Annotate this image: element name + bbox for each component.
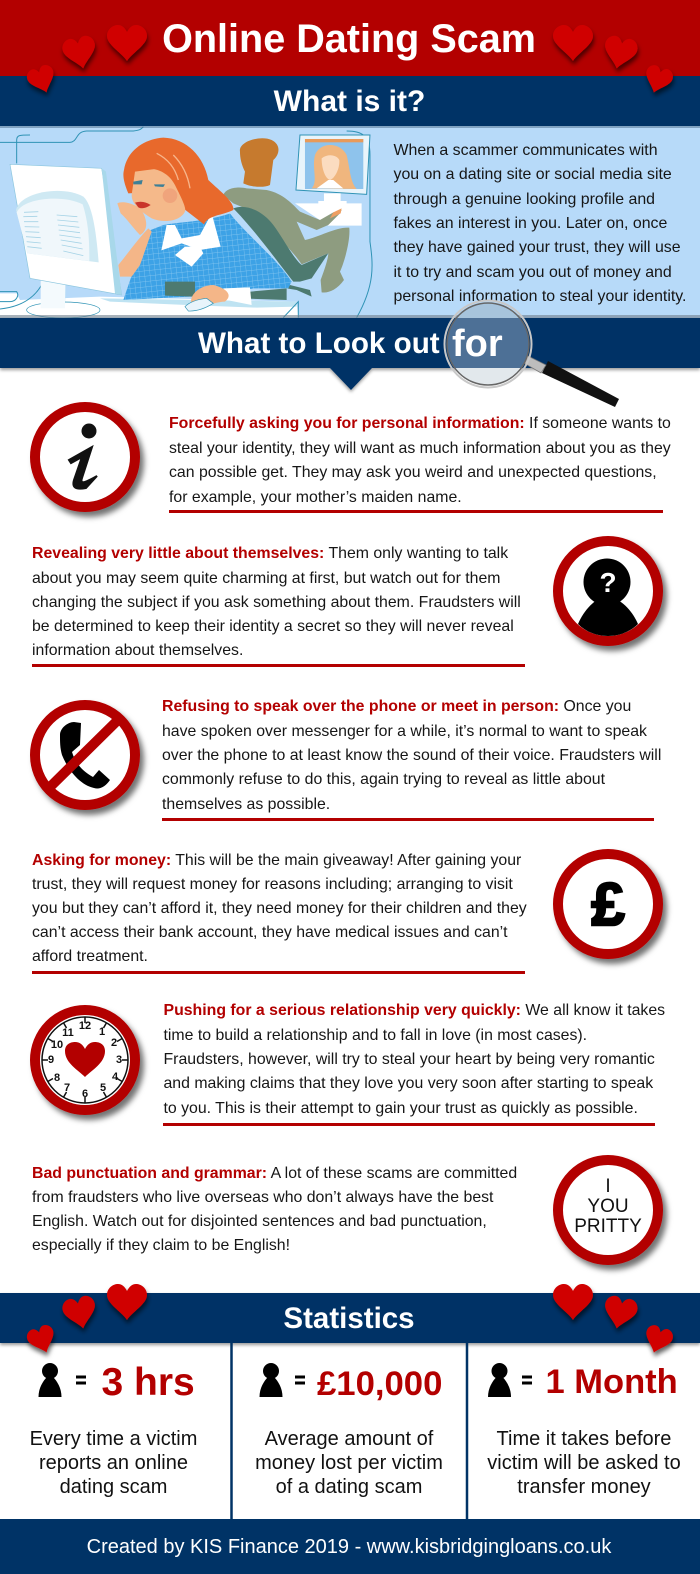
item 4 text: Asking for money: This will be the main giveaway! After gaining your: [32, 852, 522, 869]
item 3 text: Refusing to speak over the phone or meet in person: Once you: [162, 698, 631, 715]
item 6 icon: I you pritty: PRITTY: [574, 1216, 642, 1237]
woman's face: [132, 168, 185, 221]
image panel edge shadows: [0, 126, 700, 128]
sleeve and mouse hand: [223, 287, 252, 305]
item 3 text: have spoken over messenger for a while, it’s normal to want to speak: [162, 723, 647, 740]
illustration: woman and man at computers: [0, 127, 390, 318]
stat: £10,000: £10,000: [317, 1365, 442, 1403]
item 5 icon: clock with heart: 3: [116, 1054, 122, 1066]
stat: 3 hrs: 3 hrs: [102, 1361, 195, 1404]
stat: 3 hrs: reports an online: [39, 1452, 188, 1474]
item 3 text: over the phone to at least know the sound of their voice. Fraudsters will: [162, 747, 661, 764]
panel: what is it background: [0, 126, 700, 318]
section heading: What is it?: What is it?: [274, 85, 425, 118]
paragraph: what is it: [394, 142, 686, 305]
item 5 icon: clock with heart: 9: [48, 1054, 54, 1066]
title banner: [0, 0, 700, 76]
title: Online Dating Scam: [162, 17, 536, 61]
man's keyboard: [295, 203, 362, 226]
stat: 1 Month: victim will be asked to: [487, 1452, 681, 1474]
item 5 icon: clock with heart: 7: [64, 1082, 70, 1094]
item 6 text: especially if they claim to be English!: [32, 1237, 290, 1254]
stat: £10,000: [255, 1363, 443, 1498]
item 2 text: changing the subject if you ask something about them. Fraudsters will: [32, 594, 521, 611]
heading text: What to Look out: [198, 327, 440, 360]
section heading: statistics: [0, 1293, 700, 1343]
woman's body: [123, 213, 292, 300]
item 5 icon: clock with heart: 2: [111, 1037, 117, 1049]
item 5 icon: clock with heart: 12: [79, 1020, 91, 1032]
stat: 3 hrs: dating scam: [60, 1476, 167, 1498]
item 1 text: can possible get. They may ask you weird and unexpected questions,: [169, 464, 657, 481]
footer: Created by KIS Finance 2019 - www.kisbridgingloans.co.uk: [87, 1536, 612, 1558]
stat: £10,000: money lost per victim: [255, 1452, 443, 1474]
item 5 icon: clock with heart: 1: [99, 1026, 105, 1038]
item 4 icon: pound sign: £: [591, 871, 625, 938]
woman's hair back: [123, 138, 233, 224]
item 2 text: information about themselves.: [32, 642, 243, 659]
item 1 icon: information: [35, 407, 135, 507]
item 1 text: steal your identity, they will want as much information about you as they: [169, 440, 671, 457]
item 6 icon: I you pritty: [558, 1160, 658, 1260]
item 5 text: and making claims that they love you very soon after starting to speak: [164, 1075, 653, 1092]
hearts: top right: [553, 25, 675, 97]
item 2 text: [32, 545, 525, 667]
item 2 text: Revealing very little about themselves: Them only wanting to talk: [32, 545, 508, 562]
paragraph: what is it: personal information to steal your identity.: [394, 288, 686, 305]
magnified word: for: [452, 323, 503, 365]
item 4 text: [32, 852, 527, 974]
stat: 1 Month: Time it takes before: [497, 1428, 671, 1450]
item 5 icon: clock with heart: 5: [100, 1082, 106, 1094]
stat: £10,000: Average amount of: [265, 1428, 434, 1450]
item 6 icon: I you pritty: I: [605, 1176, 611, 1197]
paragraph: what is it: they have gained your trust, they will use: [394, 239, 681, 256]
man: [223, 187, 349, 292]
item 5 icon: clock with heart: 6: [82, 1088, 88, 1100]
item 2 text: be determined to keep their identity a secret so they will never reveal: [32, 618, 514, 635]
item 4 icon: pound sign: [558, 854, 658, 954]
item 1 text: [169, 415, 671, 513]
item 5 icon: clock with heart: 11: [62, 1027, 74, 1039]
item 4 text: can’t access their bank account, they have medical issues and can’t: [32, 924, 508, 941]
item 3 text: themselves as possible.: [162, 796, 330, 813]
item 3 icon: no phone: [35, 705, 135, 805]
section heading: What is it?: [0, 76, 700, 126]
hearts: top left: [25, 25, 147, 97]
item 4 text: you but they can’t afford it, they need money for their children and they: [32, 900, 527, 917]
paragraph: what is it: When a scammer communicates with: [394, 142, 658, 159]
item 4 text: afford treatment.: [32, 948, 148, 965]
desk: [0, 293, 298, 318]
item 6 text: Bad punctuation and grammar: A lot of these scams are committed: [32, 1165, 517, 1182]
man's monitor: [296, 135, 370, 194]
section heading: statistics: Statistics: [283, 1302, 415, 1335]
item 6 text: from fraudsters who live overseas who don’t always have the best: [32, 1189, 494, 1206]
footer: [0, 1519, 700, 1574]
stat: 3 hrs: [30, 1361, 197, 1498]
item 1 text: for example, your mother’s maiden name.: [169, 489, 462, 506]
item 5 icon: clock with heart: 8: [54, 1072, 60, 1084]
hearts: statistics left: [25, 1284, 147, 1357]
item 2 icon: unknown person: [558, 541, 658, 641]
item 3 text: [162, 698, 661, 821]
item 5 text: time to build a relationship and to fall in love (in most cases).: [164, 1027, 587, 1044]
paragraph: what is it: it to try and scam you out of money and: [394, 264, 672, 281]
item 3 text: commonly refuse to do this, again trying to reveal as little about: [162, 771, 606, 788]
stat: 1 Month: transfer money: [517, 1476, 651, 1498]
item 5 icon: clock with heart: 4: [112, 1071, 119, 1083]
item 2 text: about you may seem quite charming at first, but watch out for them: [32, 570, 500, 587]
stat column dividers: [232, 1343, 467, 1519]
paragraph: what is it: through a genuine looking profile and: [394, 191, 655, 208]
item 1 text: Forcefully asking you for personal information: If someone wants to: [169, 415, 671, 432]
section heading: what to look out for: [0, 318, 700, 390]
item 6 icon: I you pritty: YOU: [587, 1196, 629, 1217]
paragraph: what is it: you on a dating site or social media site: [394, 166, 672, 183]
item 6 text: [32, 1165, 517, 1254]
item 5 text: Fraudsters, however, will try to steal your heart by being very romantic: [164, 1051, 655, 1068]
stat: 1 Month: [487, 1363, 681, 1498]
item 5 icon: clock with heart: 10: [51, 1039, 63, 1051]
paragraph: what is it: fakes an interest in you. Later on, once: [394, 215, 668, 232]
stat: 1 Month: 1 Month: [546, 1363, 678, 1401]
item 4 text: trust, they will request money for reasons including; arranging to visit: [32, 876, 513, 893]
item 5 text: [163, 1002, 665, 1126]
item 5 text: Pushing for a serious relationship very quickly: We all know it takes: [164, 1002, 665, 1019]
stat: 3 hrs: Every time a victim: [30, 1428, 197, 1450]
stat: £10,000: of a dating scam: [276, 1476, 422, 1498]
item 2 icon: unknown person: ?: [599, 567, 617, 598]
item 5 icon: clock with heart: [35, 1010, 135, 1110]
item 6 text: English. Watch out for disjointed sentences and bad punctuation,: [32, 1213, 487, 1230]
item 5 text: to you. This is their attempt to gain your trust as quickly as possible.: [164, 1100, 638, 1117]
hearts: statistics right: [553, 1284, 675, 1357]
left monitor: [42, 257, 67, 308]
woman's hand: [117, 202, 146, 235]
icon: magnifying glass: [444, 300, 619, 407]
